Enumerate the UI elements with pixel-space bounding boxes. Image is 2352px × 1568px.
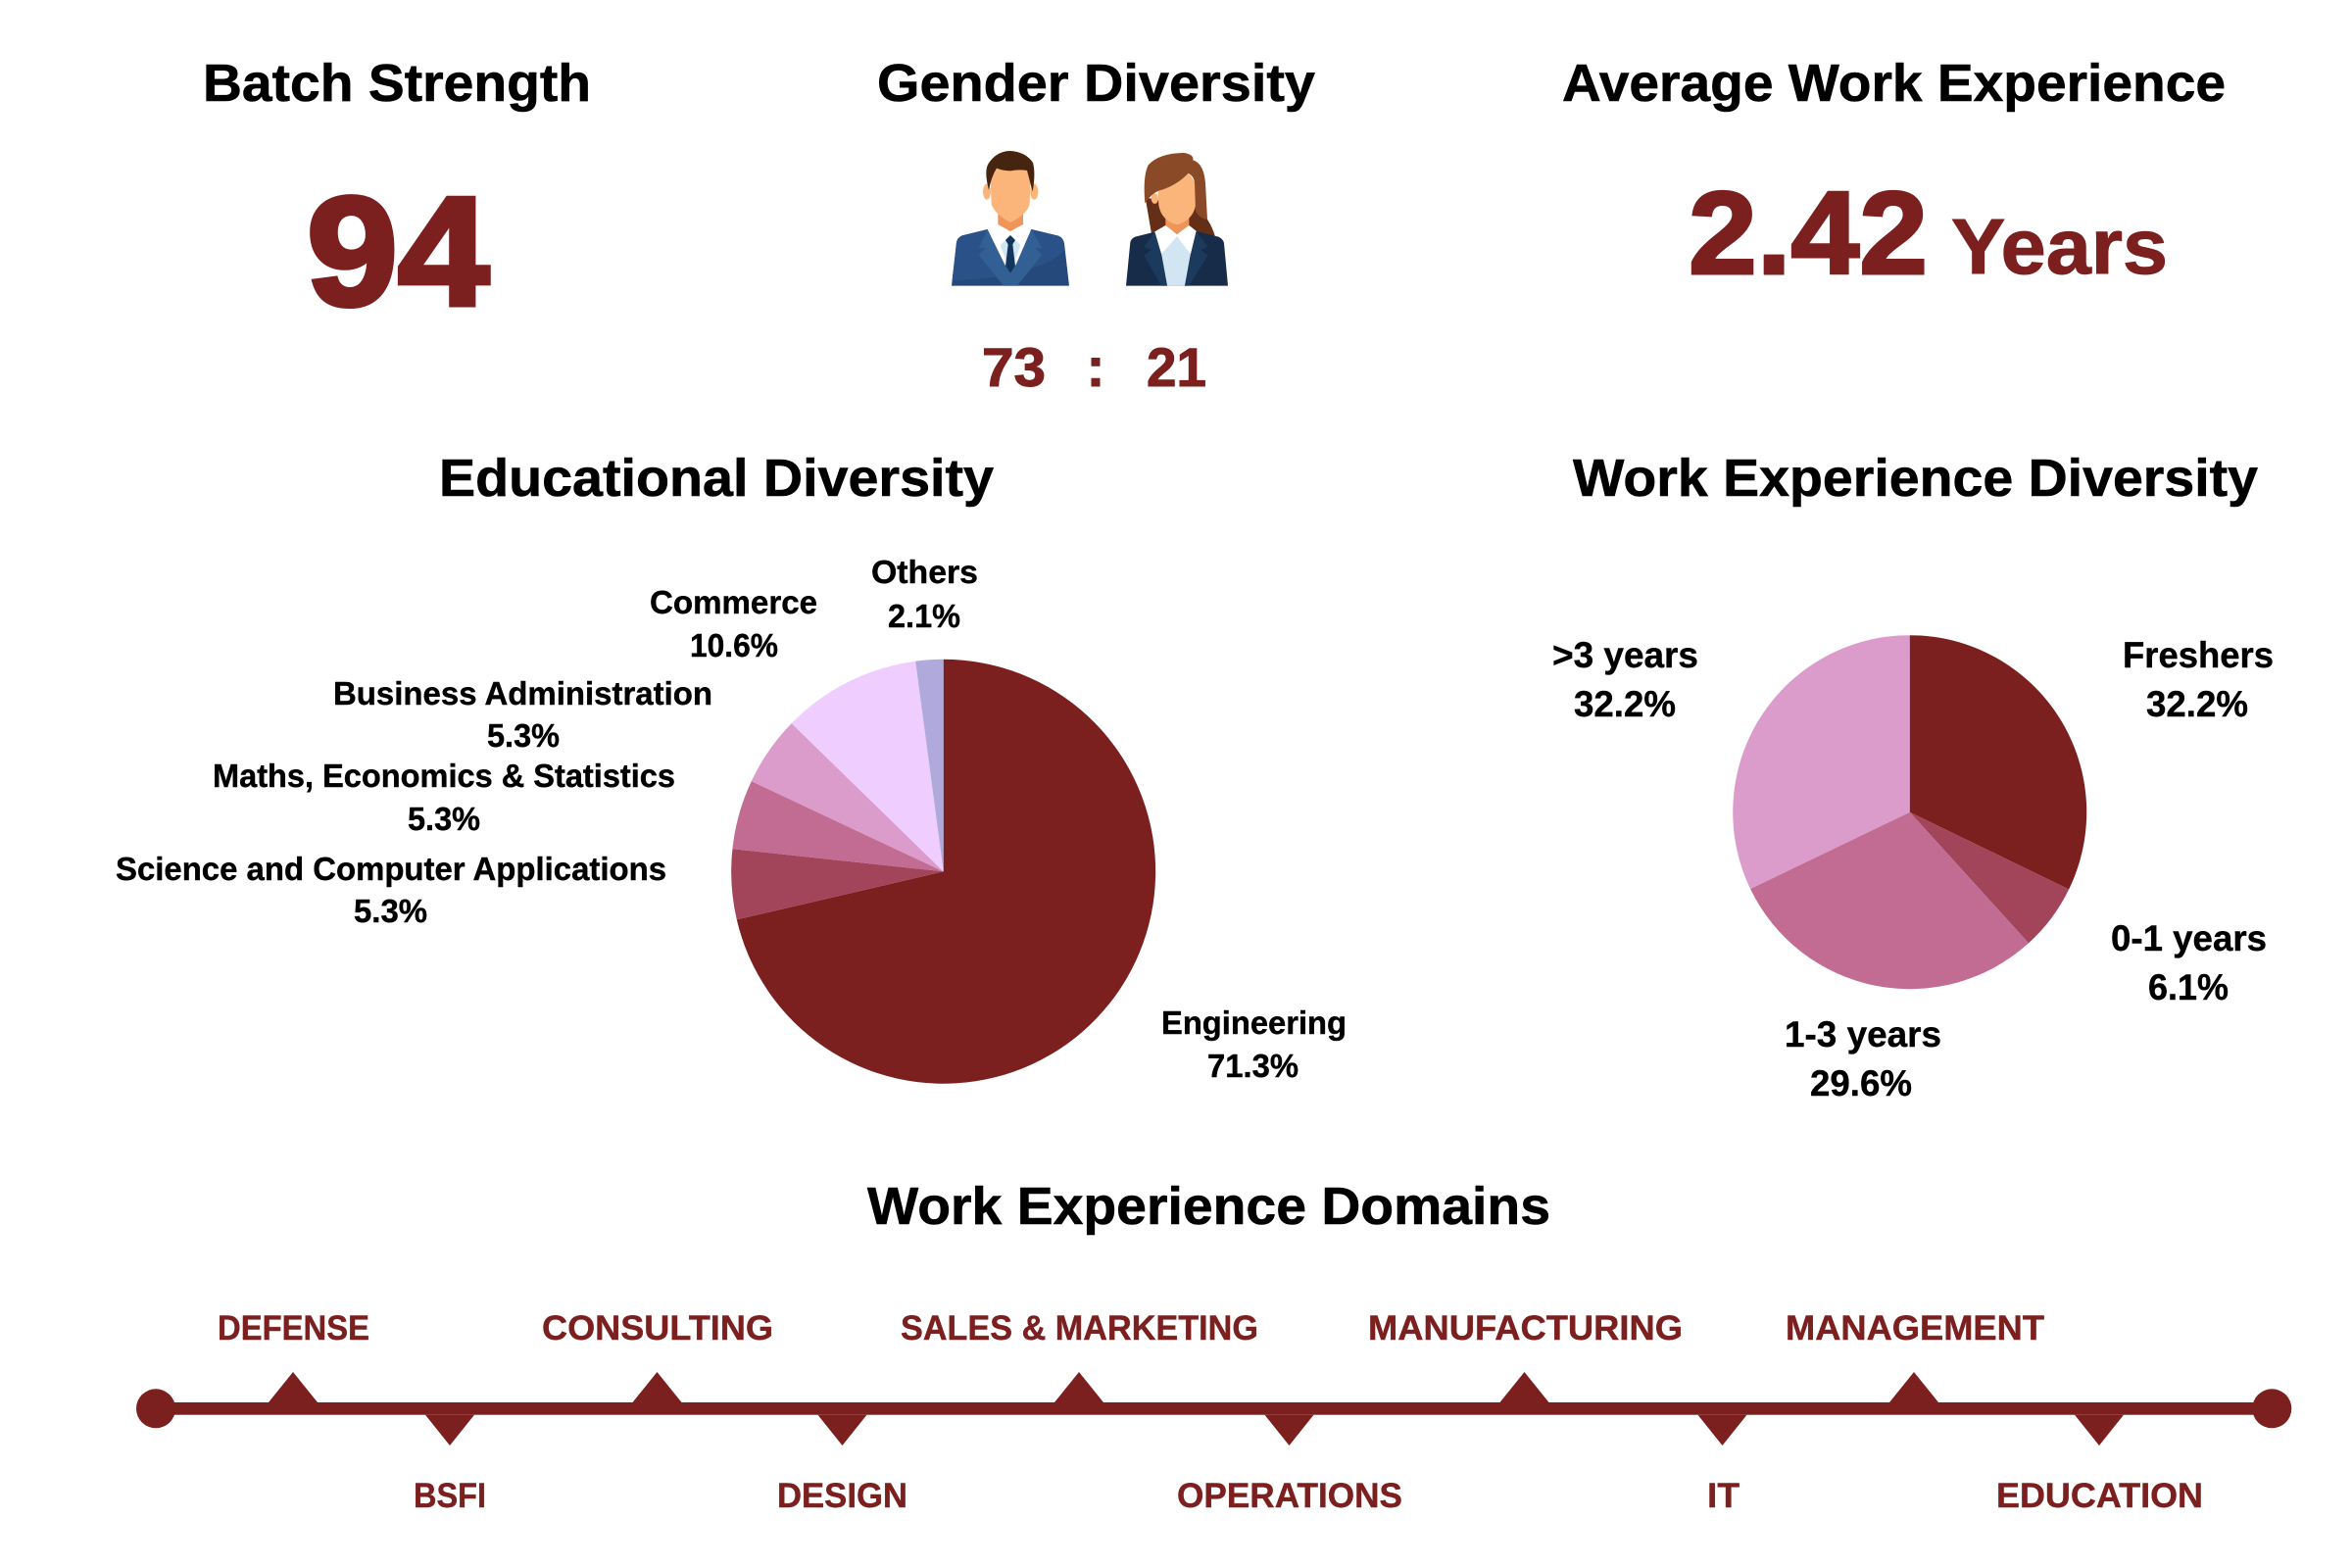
panel: average work experience xyxy=(1562,54,2226,299)
label: business administration: Business Administration xyxy=(333,675,712,711)
domain labels above axis: SALES & MARKETING xyxy=(901,1309,1258,1348)
label: science and computer applications: Science and Computer Applications xyxy=(116,851,666,887)
timeline axis xyxy=(136,1389,2291,1428)
heading: work experience domains: Work Experience Domains xyxy=(867,1177,1550,1236)
pie chart: work experience diversity xyxy=(1733,635,2086,989)
heading: batch strength: Batch Strength xyxy=(203,54,591,113)
label: 1-3 years: 29.6% xyxy=(1810,1063,1912,1103)
domain labels below axis: BSFI xyxy=(414,1477,486,1515)
text: years: Years xyxy=(1951,203,2168,290)
number: 2.42: 2.42 xyxy=(1689,168,1928,299)
label: science and computer applications: 5.3% xyxy=(354,893,427,929)
number: 21: 21 xyxy=(1147,336,1206,398)
heading: educational diversity: Educational Diversity xyxy=(439,449,994,508)
label: freshers: Freshers xyxy=(2123,635,2274,675)
label: engineering xyxy=(1161,1004,1347,1084)
label: maths, economics and statistics xyxy=(213,758,675,837)
label: more than 3 years: >3 years xyxy=(1552,635,1698,675)
timeline markers xyxy=(269,1372,2124,1446)
label: 1-3 years xyxy=(1785,1014,1941,1103)
domain labels below axis: OPERATIONS xyxy=(1177,1477,1402,1515)
label: engineering: 71.3% xyxy=(1207,1048,1298,1084)
domain labels above axis: MANUFACTURING xyxy=(1368,1309,1683,1348)
domain labels above axis: CONSULTING xyxy=(542,1309,773,1348)
domain labels below axis: DESIGN xyxy=(777,1477,907,1515)
domain labels above axis xyxy=(218,1309,2044,1348)
panel: educational diversity xyxy=(116,449,1347,1084)
number: 73: 73 xyxy=(982,336,1046,398)
label: others xyxy=(871,554,978,634)
panel: gender diversity xyxy=(877,54,1315,399)
label: science and computer applications xyxy=(116,851,666,929)
label: engineering: Engineering xyxy=(1161,1004,1347,1041)
domain labels above axis: MANAGEMENT xyxy=(1786,1309,2044,1348)
icon: woman in blazer xyxy=(1126,153,1228,286)
domain labels above axis: DEFENSE xyxy=(218,1309,369,1348)
label: more than 3 years: 32.2% xyxy=(1574,684,1676,724)
label: 1-3 years: 1-3 years xyxy=(1785,1014,1941,1054)
label: commerce: 10.6% xyxy=(690,627,778,663)
label: 0-1 years: 6.1% xyxy=(2148,967,2229,1007)
number: 94: 94 xyxy=(307,166,489,338)
heading: average work experience: Average Work Experience xyxy=(1562,54,2226,113)
heading: gender diversity: Gender Diversity xyxy=(877,54,1315,113)
label: 0-1 years: 0-1 years xyxy=(2111,918,2267,958)
label: 0-1 years xyxy=(2111,918,2267,1007)
domain labels below axis: IT xyxy=(1707,1477,1740,1515)
panel: batch strength xyxy=(203,54,591,338)
heading: work experience diversity: Work Experience Diversity xyxy=(1573,449,2258,508)
panel: work experience diversity xyxy=(1552,449,2274,1103)
label: maths, economics and statistics: Maths, Economics & Statistics xyxy=(213,758,675,794)
domain labels below axis: EDUCATION xyxy=(1996,1477,2203,1515)
label: others: Others xyxy=(871,554,978,590)
label: business administration xyxy=(333,675,712,754)
label: commerce: Commerce xyxy=(650,584,817,620)
domain labels below axis xyxy=(414,1477,2203,1515)
label: freshers xyxy=(2123,635,2274,724)
pie chart: educational diversity xyxy=(731,660,1155,1084)
label: maths, economics and statistics: 5.3% xyxy=(408,801,480,837)
label: commerce xyxy=(650,584,817,663)
icon: man in suit xyxy=(952,151,1069,286)
label: others: 2.1% xyxy=(888,598,960,634)
label: business administration: 5.3% xyxy=(487,717,560,754)
number: colon: : xyxy=(1087,336,1104,399)
label: freshers: 32.2% xyxy=(2146,684,2248,724)
label: more than 3 years xyxy=(1552,635,1698,724)
panel: work experience domains xyxy=(136,1177,2291,1515)
